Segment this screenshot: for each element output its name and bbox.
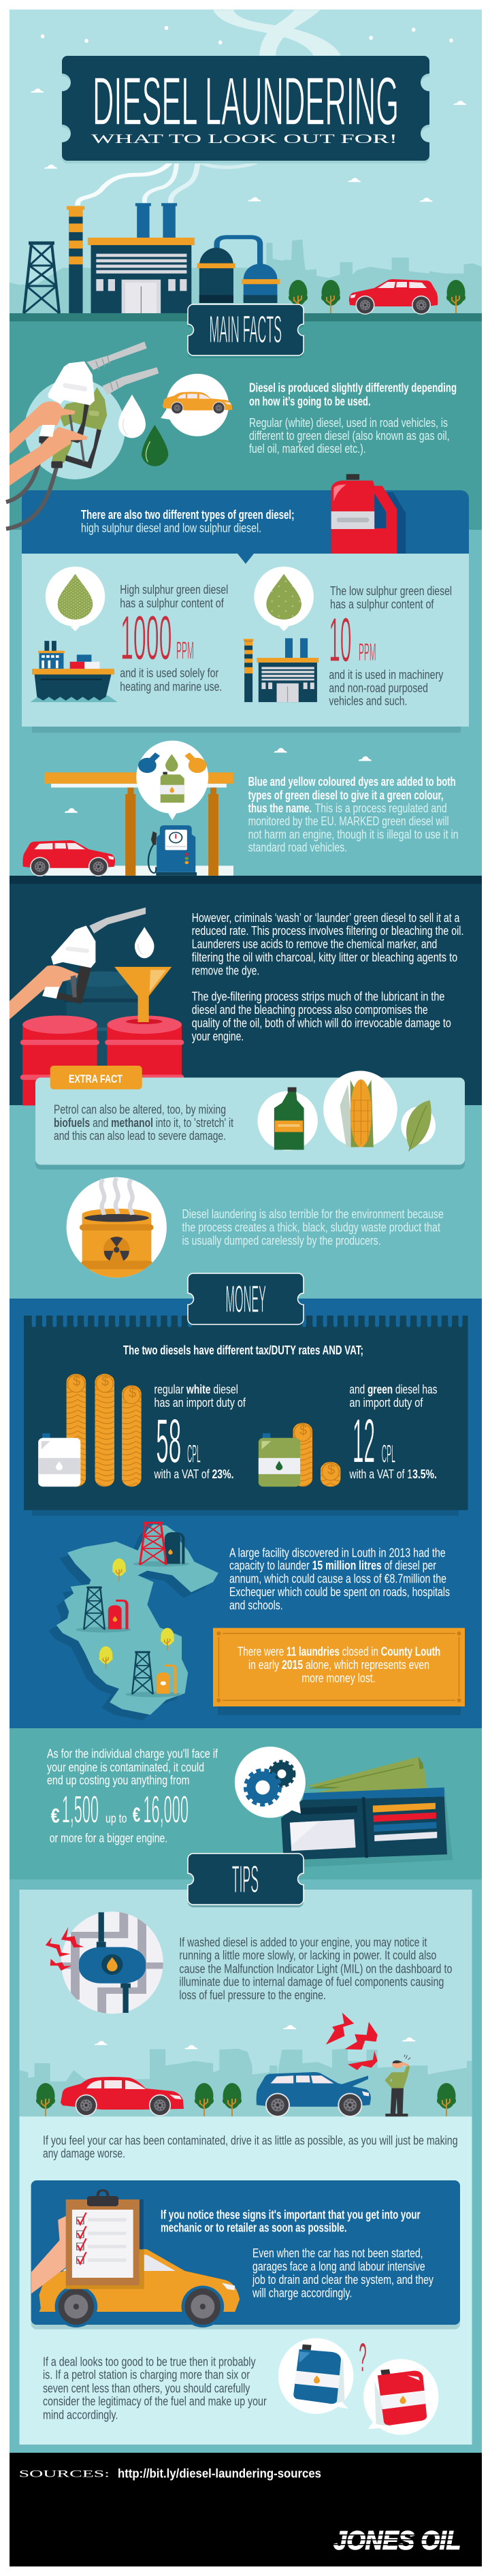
ticket: Tips [188, 1854, 304, 1907]
text: criminals launder [192, 910, 463, 1043]
icon: nozzle and hand [10, 925, 95, 1019]
text: deal too good: seven cent less than others, you should carefully [43, 2381, 250, 2395]
text: petrol altered: Petrol can also be altered, too, by mixing [54, 1102, 226, 1117]
text: deal too good: consider the legitimacy of the fuel and make up your [43, 2394, 267, 2408]
text: coloured dyes [248, 774, 459, 855]
icon: red tank on map [108, 1601, 127, 1629]
text: green diesel duty: 12 [353, 1407, 375, 1476]
icon: speech bubble [161, 374, 229, 436]
text: criminals launder: your engine. [192, 1029, 244, 1043]
tag: extra fact: EXTRA FACT [69, 1073, 122, 1085]
text: white diesel duty: CPL [187, 1440, 201, 1468]
text: white diesel duty [154, 1382, 246, 1481]
icon: wallet [281, 1787, 447, 1860]
heading: two diesels: The two diesels have different tax/DUTY rates AND VAT; [123, 1343, 363, 1357]
icon: oil derrick [24, 243, 59, 313]
text: two types: high sulphur diesel and low sulphur diesel. [81, 521, 261, 535]
text: mechanic: mechanic or to retailer as soon as possible. [161, 2220, 347, 2234]
text: deal too good [43, 2354, 267, 2421]
text: contaminated [43, 2133, 458, 2161]
text: individual charge: As for the individual charge you'll face if [47, 1747, 218, 1761]
icon: coin stacks white diesel [67, 1374, 142, 1486]
icon: trees [36, 2083, 456, 2116]
text: high sulphur: High sulphur green diesel [120, 582, 228, 597]
icon: stars [41, 26, 453, 44]
text: high sulphur: 1000 [120, 603, 172, 673]
icon: navy tank on map [165, 1532, 183, 1564]
icon: low sulphur drop [254, 567, 314, 631]
hero illustration: sky, smoke, skyline [10, 10, 482, 313]
text: ? [359, 2336, 366, 2380]
text: green diesel duty: CPL [382, 1440, 395, 1468]
icon: map derricks [84, 1523, 166, 1694]
text: deal too good: mind accordingly. [43, 2407, 118, 2421]
icon: skyline [20, 2048, 472, 2116]
text: mechanic: job to drain and clear the system, and they [252, 2272, 434, 2287]
icon: white can [38, 1433, 80, 1486]
text: white diesel duty: has an import duty of [154, 1395, 246, 1410]
text: high sulphur [120, 582, 228, 694]
illustration: barrels and funnel [10, 908, 184, 1105]
icon: small factory [244, 638, 318, 702]
icon: tree [289, 280, 466, 313]
illustration: engine [46, 1911, 166, 2016]
text: mechanic [161, 2207, 434, 2300]
icon: clouds [95, 2025, 415, 2049]
panel: extra fact [35, 1066, 465, 1170]
text: dollar signs: $ [129, 1386, 136, 1401]
text: washed diesel: loss of fuel pressure to the engine. [179, 1988, 326, 2002]
panel: tax and duty [24, 1316, 468, 1516]
icon: gears [246, 1762, 294, 1804]
icon: radiation symbol [104, 1237, 129, 1260]
text: diesel production: on how it’s going to be used. [249, 394, 371, 409]
ticket: Money [188, 1273, 304, 1324]
text: diesel production [249, 381, 457, 456]
text: green diesel duty [349, 1382, 437, 1481]
tag: extra fact [50, 1066, 142, 1090]
icon: hose [89, 908, 146, 934]
icon: clouds [65, 748, 372, 813]
icon: white drop [135, 927, 154, 958]
icon: clouds [31, 89, 467, 202]
illustration: map of Ireland [48, 1525, 218, 1721]
icon: striped chimney [67, 206, 84, 313]
icon: leaf [406, 1100, 431, 1151]
icon: canopy [44, 772, 233, 876]
icon: green drop [142, 425, 168, 466]
illustration: sulphur icons [31, 567, 318, 702]
icon: coin stacks green diesel [293, 1422, 340, 1486]
icon: steam [101, 1178, 133, 1215]
text: high sulphur: heating and marine use. [120, 680, 222, 694]
icon: smoke above banner [213, 10, 341, 56]
text: petrol altered [54, 1102, 233, 1143]
icon: red barrels [20, 1015, 184, 1105]
icon: money [306, 1757, 427, 1793]
text: individual charge: end up costing you anything from [47, 1773, 189, 1787]
icon: clipboard [66, 2191, 144, 2289]
icon: red car [349, 279, 438, 315]
icon: speech bubble [235, 1747, 306, 1818]
text: green diesel duty: an import duty of [349, 1395, 423, 1410]
text: washed diesel [179, 1935, 452, 2002]
text: individual charge: 1,500 [62, 1788, 99, 1832]
panel: tips [19, 1890, 472, 2445]
icon: warning sparks [46, 1927, 84, 1971]
text: large facility [229, 1546, 450, 1612]
icon: orange tank on map [157, 1666, 176, 1694]
icon: funnel [114, 967, 172, 1022]
logo: Jones Oil: JONES OIL [333, 2526, 461, 2555]
text: green diesel duty: and green diesel has [349, 1382, 437, 1397]
text: two types [81, 507, 294, 535]
text: mechanic: will charge accordingly. [252, 2285, 352, 2300]
text: individual charge: € [133, 1804, 140, 1826]
text: coloured dyes: standard road vehicles. [248, 840, 347, 855]
text: low sulphur: PPM [359, 638, 376, 666]
icon: orange car [39, 2248, 240, 2327]
text: MAIN FACTS [210, 308, 282, 351]
icon: storage tanks [197, 248, 280, 303]
text: individual charge: up to [105, 1812, 127, 1826]
text: criminals launder: remove the dye. [192, 964, 259, 978]
text: coloured dyes: This is a process regulated and [315, 801, 447, 815]
icon: orange car [163, 392, 232, 414]
icon: red sedan [61, 2077, 184, 2116]
text: low sulphur: and it is used in machinery [329, 667, 444, 682]
icon: red jerry can [331, 474, 406, 554]
text: low sulphur: The low sulphur green diesel [330, 584, 452, 598]
icon: white drop [118, 394, 146, 438]
text: contaminated: any damage worse. [43, 2146, 125, 2161]
icon: car bonnet [340, 2076, 368, 2089]
text: individual charge: € [51, 1805, 60, 1828]
text: low sulphur: has a sulphur content of [330, 597, 434, 611]
text: white diesel duty: regular white diesel [154, 1382, 238, 1397]
text: individual charge: or more for a bigger engine. [50, 1831, 167, 1845]
icon: dark barrel [64, 971, 140, 1073]
icon: corn [340, 1079, 374, 1147]
icon: blue car [257, 2072, 371, 2117]
text: dollar signs [73, 1374, 335, 1478]
callout: 11 laundries: more money lost. [301, 1671, 376, 1685]
text: environment: is usually dumped carelessly by the producers. [182, 1233, 381, 1247]
footer: sources: SOURCES: [19, 2468, 110, 2479]
callout: 11 laundries [213, 1628, 465, 1715]
icon: fuel pump [148, 825, 197, 876]
icon: person [385, 2054, 410, 2116]
illustration: speech bubble with car and fuel cans [161, 374, 406, 554]
icon: hoses [6, 441, 56, 529]
illustration: toxic waste barrel [67, 1177, 167, 1282]
text: deal too good: is. If a petrol station is charging more than six or [43, 2368, 250, 2382]
icon: yellow trees [99, 1559, 174, 1669]
ticket: Main facts [188, 304, 304, 358]
text: green diesel duty: with a VAT of 13.5%. [349, 1467, 437, 1481]
text: low sulphur: 10 [329, 605, 351, 675]
text: dollar signs: $ [327, 1463, 335, 1478]
text: mechanic: garages face a long and labour intensive [252, 2259, 425, 2274]
ticket: Money: MONEY [226, 1277, 266, 1321]
text: individual charge: 16,000 [143, 1788, 189, 1832]
text: coloured dyes: thus the name. [248, 801, 312, 815]
callout: 11 laundries: There were 11 laundries closed in County Louth [238, 1644, 440, 1659]
ticket: Tips: TIPS [232, 1858, 259, 1901]
icon: pipe between tanks [217, 237, 260, 264]
illustration: wallet and gears [235, 1747, 453, 1867]
text: petrol altered: and this can also lead to severe damage. [54, 1128, 226, 1143]
icon: high sulphur drop [46, 567, 105, 631]
icon: factory [88, 238, 195, 313]
panel: mechanic [31, 2180, 460, 2329]
text: white diesel duty: 58 [156, 1407, 181, 1476]
text: high sulphur: PPM [176, 636, 194, 665]
text: large facility: and schools. [229, 1597, 283, 1612]
text: deal too good: If a deal looks too good to be true then it probably [43, 2354, 256, 2368]
illustration: coins and cans [38, 1374, 340, 1486]
panel: two green diesels [22, 490, 469, 733]
text: large facility: capacity to launder 15 million litres of diesel per [229, 1558, 436, 1572]
text: environment [182, 1207, 444, 1247]
text: dollar signs: $ [73, 1374, 80, 1389]
text: diesel production: fuel oil, marked diesel etc.). [249, 441, 366, 456]
heading: What to look out for: WHAT TO LOOK OUT FOR! [91, 132, 397, 146]
icon: warning sparks [326, 2013, 378, 2070]
icon: dye bubble [136, 741, 208, 820]
icon: ship [31, 641, 118, 702]
text: mechanic: Even when the car has not been started, [252, 2246, 423, 2260]
title banner [62, 56, 429, 163]
icon: blue factory stacks [135, 203, 177, 238]
callout: 11 laundries: in early 2015 alone, which represents even [248, 1657, 429, 1672]
icon: bottle [274, 1087, 304, 1149]
illustration: petrol station [44, 741, 372, 876]
icons: bottle, corn, leaf [257, 1071, 436, 1151]
illustration: fuel cans in bubbles [278, 2338, 439, 2435]
footer: sources: http://bit.ly/diesel-laundering-sources [118, 2466, 321, 2480]
text: high sulphur: and it is used solely for [120, 666, 218, 680]
icon: city skyline [10, 240, 482, 313]
icon: fuel tank [79, 1912, 146, 2013]
illustration: nozzles and hands [6, 342, 168, 529]
decorative perforation [32, 1316, 462, 1327]
icon: smoke from chimneys [78, 160, 257, 206]
text: dollar signs: $ [299, 1423, 307, 1438]
text: high sulphur: has a sulphur content of [120, 596, 224, 610]
text: low sulphur [329, 584, 452, 708]
text: individual charge [47, 1747, 218, 1845]
text: petrol altered: biofuels and methanol into it, to 'stretch' it [54, 1115, 233, 1130]
illustration: roadside scene [20, 2013, 472, 2116]
illustration: checklist and car [31, 2191, 240, 2327]
icon: red can bubble [363, 2359, 439, 2435]
icon: blue can bubble [278, 2338, 353, 2414]
icon: red car at pump [22, 840, 115, 876]
text: dollar signs: $ [101, 1374, 109, 1389]
icon: hand [31, 2213, 77, 2293]
text: low sulphur: and non-road purposed [329, 681, 428, 695]
text: two types: There are also two different types of green diesel; [81, 507, 294, 522]
text: white diesel duty: with a VAT of 23%. [154, 1467, 234, 1481]
icon: green can [259, 1433, 300, 1486]
text: low sulphur: vehicles and such. [329, 694, 407, 708]
text: individual charge: your engine is contaminated, it could [47, 1760, 204, 1775]
footer: sources [19, 2466, 321, 2480]
